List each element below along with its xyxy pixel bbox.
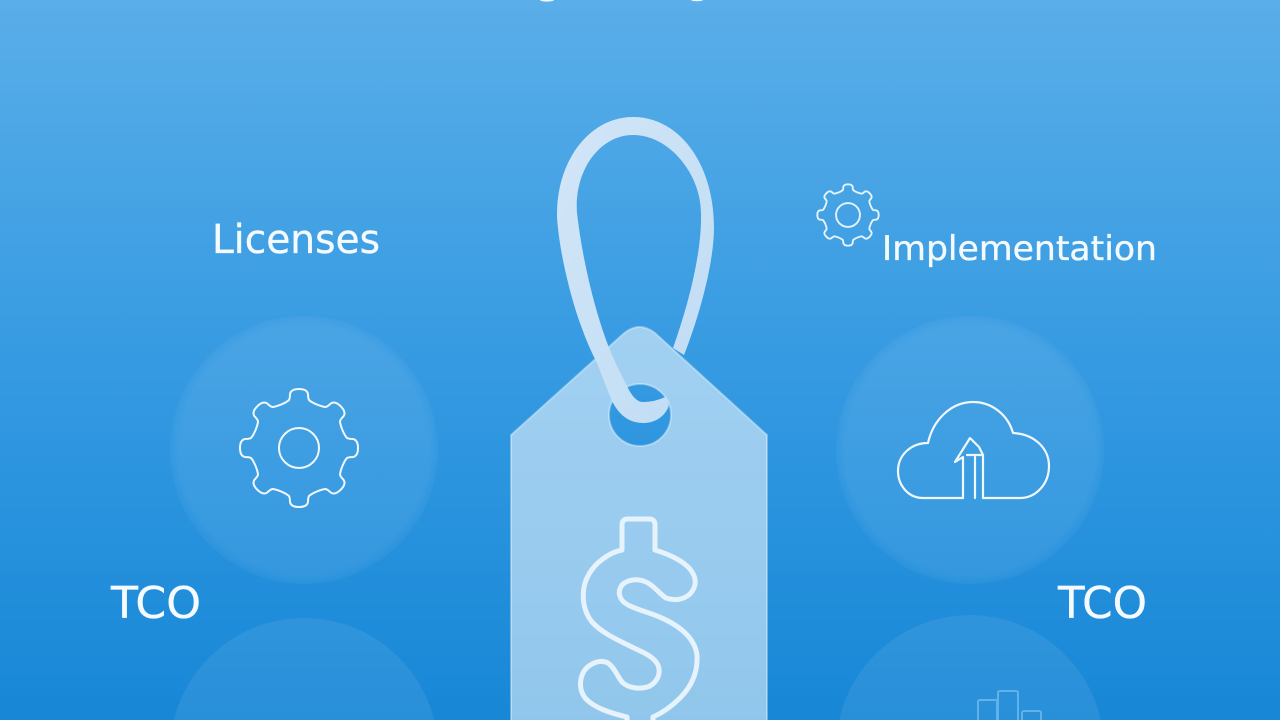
heading: TCO right: TCO (1057, 578, 1147, 629)
heading: TCO left: TCO (110, 578, 201, 629)
panel: lower right TCO disc (839, 615, 1101, 720)
string loop (557, 117, 714, 423)
dollar sign (580, 519, 697, 720)
icon: cloud upload (898, 402, 1049, 498)
icon: small gear (817, 184, 879, 246)
tag body (511, 327, 767, 720)
heading: Licenses: Licenses (212, 217, 380, 263)
icon: bar chart (978, 691, 1041, 720)
clipped title fragments at top edge (540, 0, 703, 2)
panel: lower left TCO disc (174, 618, 434, 720)
price tag illustration (511, 117, 767, 720)
heading: Implementation: Implementation (882, 229, 1157, 269)
icon: large gear (240, 389, 358, 507)
tag outline (511, 327, 767, 720)
panel: implementation disc (836, 316, 1104, 584)
panel: licenses disc (170, 316, 438, 584)
